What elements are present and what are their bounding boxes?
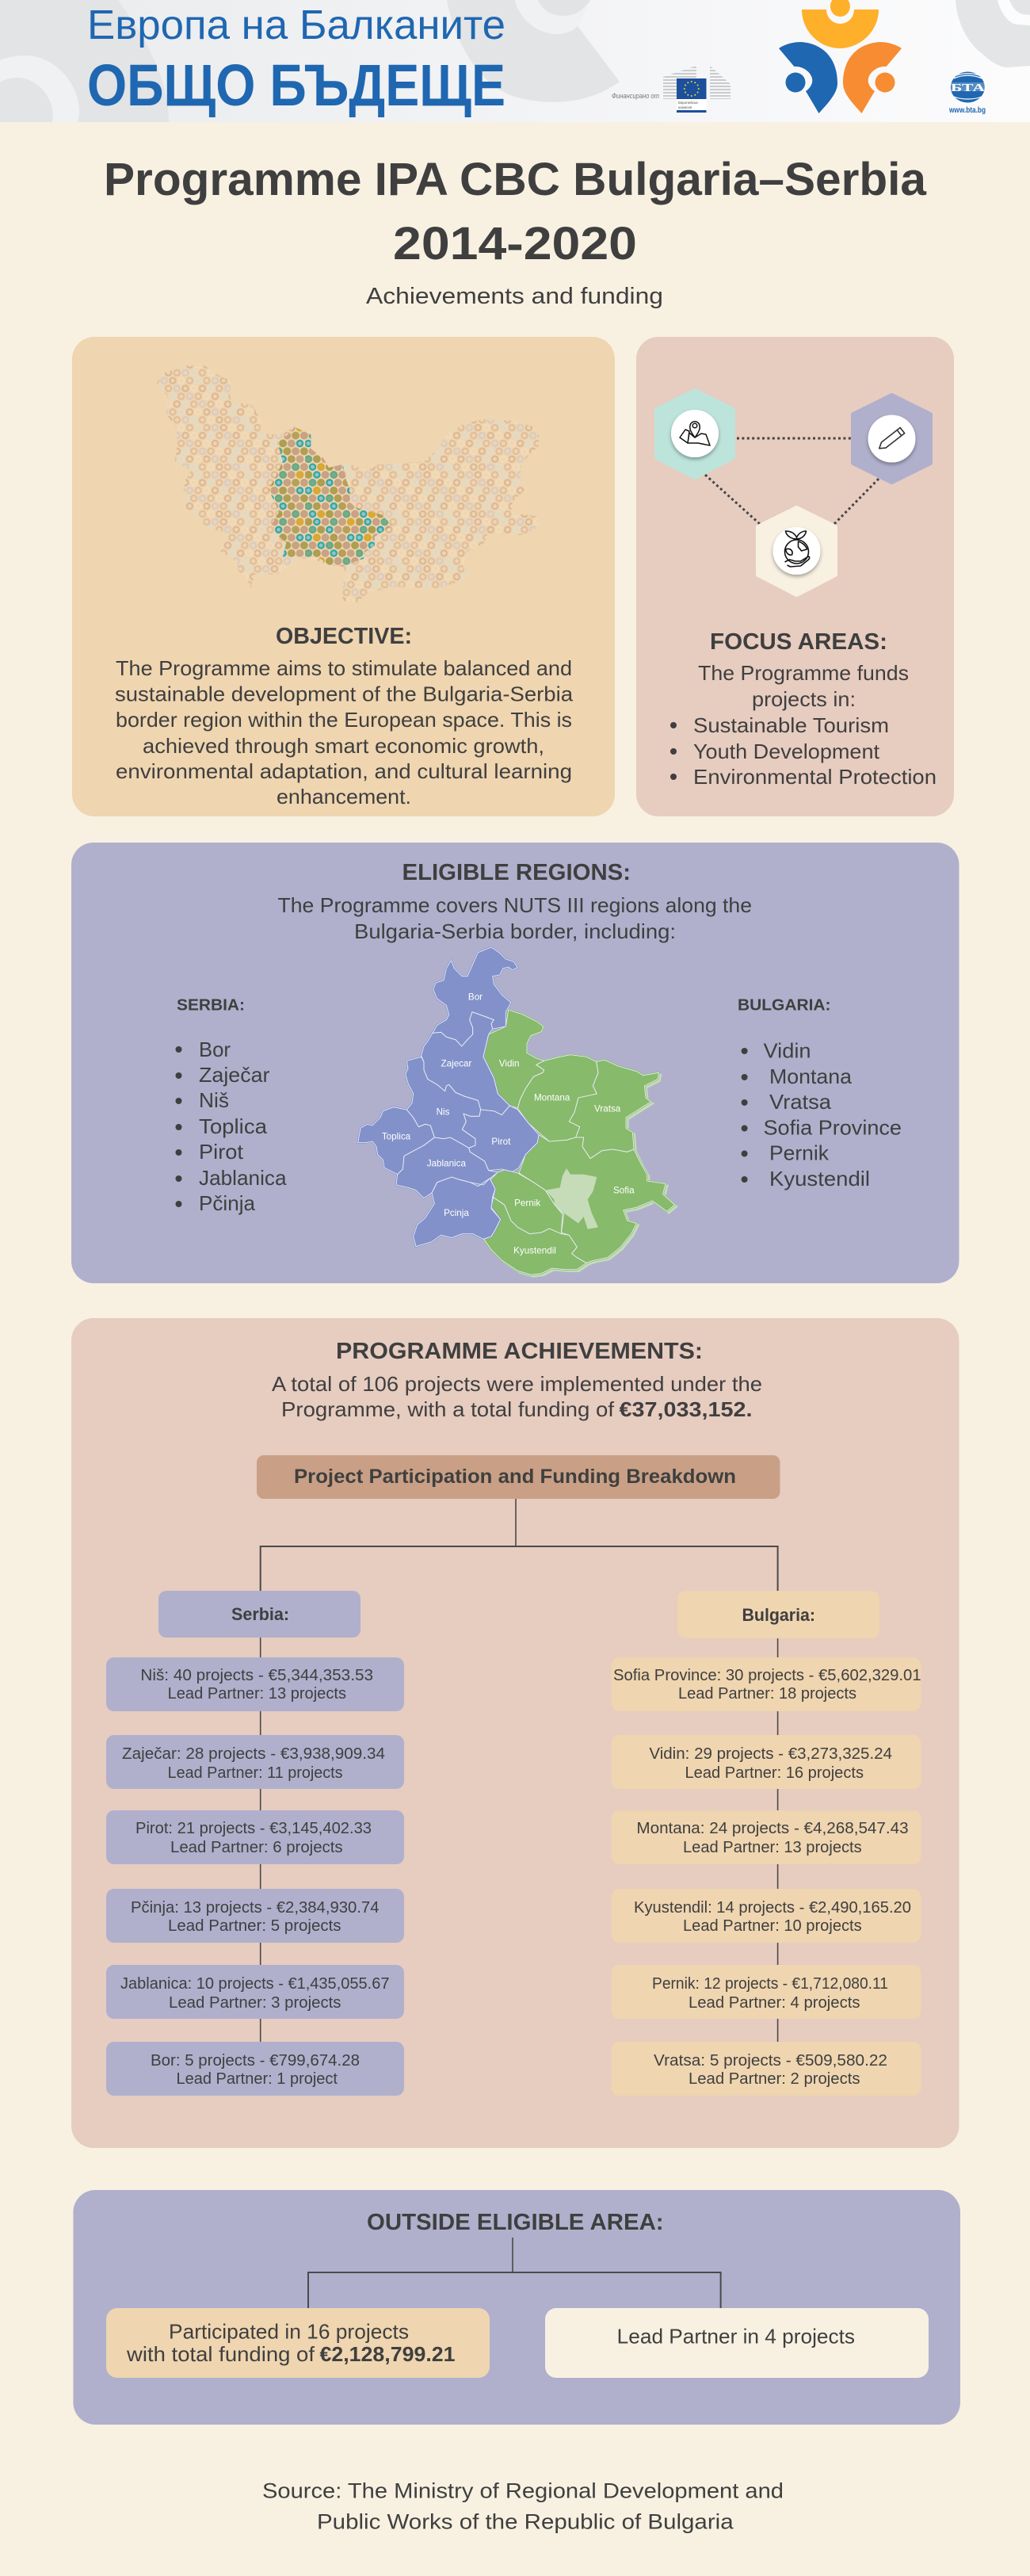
list: Serbia regions: Zaječar	[199, 1063, 270, 1087]
card: Sofia Province: Lead Partner: 18 projects	[678, 1685, 856, 1703]
banner title: ОБЩО БЪДЕЩЕ	[87, 52, 505, 118]
heading: outside eligible area: OUTSIDE ELIGIBLE AREA:	[367, 2210, 664, 2235]
intro text: Bulgaria-Serbia border, including:	[354, 919, 676, 943]
European Commission funding logo: Европейска	[678, 100, 698, 105]
European Commission funding logo	[612, 66, 731, 113]
card: Bor: Bor: 5 projects - €799,674.28	[151, 2052, 360, 2070]
map of eligible regions: Montana	[534, 1092, 570, 1103]
objective text	[115, 656, 574, 808]
list: Serbia regions: Pčinja	[199, 1191, 256, 1215]
card: Zaječar: Zaječar: 28 projects - €3,938,909.34	[122, 1745, 385, 1763]
map of eligible regions: Pernik	[514, 1198, 540, 1209]
programme logo: three figures	[779, 0, 902, 113]
heading: eligible regions: ELIGIBLE REGIONS:	[402, 860, 631, 885]
source note: Public Works of the Republic of Bulgaria	[317, 2510, 734, 2534]
list: Serbia regions: SERBIA:	[177, 997, 245, 1015]
list: Bulgaria regions: Vidin	[764, 1038, 811, 1062]
BTA logo: www.bta.bg	[948, 106, 986, 115]
map of eligible regions: Nis	[437, 1106, 450, 1117]
list: Serbia regions: Pirot	[199, 1140, 244, 1164]
card: Vratsa	[612, 2042, 921, 2096]
banner title: Европа на Балканите	[87, 2, 505, 48]
card: Pirot: Pirot: 21 projects - €3,145,402.33	[135, 1820, 372, 1837]
BTA logo	[948, 71, 986, 115]
card: participation	[106, 2308, 490, 2378]
list: Bulgaria regions: Pernik	[769, 1141, 830, 1165]
column header: Bulgaria: Bulgaria:	[742, 1605, 815, 1625]
map of eligible regions: Pirot	[491, 1137, 511, 1147]
source note	[262, 2479, 784, 2534]
focus areas text: Sustainable Tourism	[693, 713, 889, 737]
panel: eligible regions	[71, 843, 959, 1283]
map of eligible regions: Vratsa	[594, 1104, 621, 1114]
card: Jablanica: Jablanica: 10 projects - €1,435,055.67	[120, 1975, 390, 1993]
card: Pčinja: Lead Partner: 5 projects	[168, 1917, 341, 1935]
objective text: enhancement.	[277, 785, 411, 808]
objective text: The Programme aims to stimulate balanced and	[116, 656, 572, 680]
objective text: sustainable development of the Bulgaria-Serbia	[115, 682, 574, 705]
card: Pčinja	[106, 1889, 404, 1943]
card: Kyustendil: Kyustendil: 14 projects - €2,490,165.20	[634, 1899, 911, 1917]
column header: Serbia: Serbia:	[231, 1604, 289, 1624]
breakdown header box	[257, 1455, 780, 1499]
column header: Bulgaria	[677, 1591, 879, 1638]
map of eligible regions: Vidin	[499, 1059, 520, 1069]
card: Vidin	[612, 1735, 921, 1789]
panel: outside eligible area	[73, 2190, 960, 2425]
icon: map pin on hexagon	[657, 391, 733, 477]
list: Serbia regions: Toplica	[199, 1114, 268, 1138]
card: participation: with total funding of	[126, 2342, 315, 2366]
achievements summary: €37,033,152.	[620, 1397, 753, 1421]
card: Jablanica: Lead Partner: 3 projects	[169, 1994, 341, 2012]
card: lead partner	[545, 2308, 929, 2378]
card: Zaječar	[106, 1735, 404, 1789]
icon: earth in hand on hexagon	[758, 508, 835, 594]
card: participation: Participated in 16 projects	[169, 2320, 409, 2344]
intro text	[277, 893, 752, 943]
objective text: border region within the European space. This is	[116, 708, 572, 732]
card: Pernik	[612, 1965, 921, 2019]
card: Vidin: Lead Partner: 16 projects	[685, 1764, 864, 1782]
objective text: achieved through smart economic growth,	[143, 734, 544, 758]
card: Vidin: Vidin: 29 projects - €3,273,325.24	[649, 1745, 892, 1763]
map of eligible regions: Bor	[468, 992, 483, 1002]
achievements summary	[272, 1372, 762, 1421]
map of eligible regions: Toplica	[382, 1131, 411, 1141]
title: Programme IPA CBC Bulgaria–Serbia	[104, 154, 927, 205]
map of eligible regions: Pcinja	[444, 1208, 469, 1218]
dotted connectors	[705, 438, 879, 525]
panel: focus areas	[636, 337, 954, 816]
card: Pernik: Lead Partner: 4 projects	[689, 1994, 860, 2012]
card: lead partner: Lead Partner in 4 projects	[617, 2325, 855, 2349]
tree connectors	[308, 2238, 721, 2308]
focus areas text: Environmental Protection	[693, 765, 937, 789]
card: Montana: Montana: 24 projects - €4,268,547.43	[636, 1820, 909, 1837]
panel: programme achievements	[71, 1318, 959, 2148]
card: Bor: Lead Partner: 1 project	[176, 2070, 338, 2088]
source note: Source: The Ministry of Regional Development and	[262, 2479, 784, 2503]
focus areas text: Youth Development	[693, 740, 880, 763]
list: Serbia regions: Jablanica	[199, 1166, 287, 1190]
column header: Serbia	[158, 1591, 360, 1638]
subtitle: Achievements and funding	[366, 284, 663, 309]
map of eligible regions	[358, 947, 677, 1277]
card: Montana: Lead Partner: 13 projects	[683, 1839, 862, 1856]
card: Sofia Province	[612, 1657, 921, 1711]
European Commission funding logo: Финансирано от	[612, 92, 659, 100]
list: Bulgaria regions: BULGARIA:	[738, 997, 830, 1015]
tree connectors	[261, 1499, 778, 2042]
European Commission funding logo: комисия	[678, 105, 692, 109]
icon: pencil on hexagon	[853, 396, 930, 482]
banner title	[87, 2, 505, 118]
header banner	[0, 0, 1030, 122]
map of eligible regions: Jablanica	[427, 1158, 466, 1168]
list: Bulgaria regions	[738, 997, 902, 1191]
focus areas text: projects in:	[752, 687, 856, 711]
list: Serbia regions	[176, 997, 287, 1215]
heading: objective: OBJECTIVE:	[276, 624, 412, 649]
card: Sofia Province: Sofia Province: 30 projects - €5,602,329.01	[613, 1667, 921, 1684]
card: Niš: Lead Partner: 13 projects	[168, 1685, 346, 1703]
card: Jablanica	[106, 1965, 404, 2019]
card: Niš	[106, 1657, 404, 1711]
list: Bulgaria regions: Vratsa	[769, 1090, 832, 1114]
card: Pirot	[106, 1810, 404, 1864]
card: Kyustendil	[612, 1889, 921, 1943]
intro text: The Programme covers NUTS III regions along the	[277, 893, 752, 917]
achievements summary: Programme, with a total funding of	[281, 1397, 615, 1421]
list: Serbia regions: Bor	[199, 1038, 231, 1061]
card: Vratsa: Vratsa: 5 projects - €509,580.22	[654, 2052, 887, 2070]
card: Montana	[612, 1810, 921, 1864]
heading: focus areas: FOCUS AREAS:	[710, 629, 887, 655]
heading: achievements: PROGRAMME ACHIEVEMENTS:	[336, 1339, 703, 1364]
map of eligible regions: Sofia	[613, 1186, 635, 1196]
focus areas text	[670, 661, 937, 789]
list: Serbia regions: Niš	[199, 1088, 229, 1112]
breakdown header box: Project Participation and Funding Breakdown	[294, 1466, 736, 1488]
objective text: environmental adaptation, and cultural learning	[116, 759, 572, 783]
card: participation: €2,128,799.21	[320, 2342, 455, 2366]
card: Pirot: Lead Partner: 6 projects	[170, 1839, 343, 1856]
list: Bulgaria regions: Kyustendil	[769, 1167, 870, 1191]
card: Kyustendil: Lead Partner: 10 projects	[683, 1917, 862, 1935]
map of eligible regions: Kyustendil	[513, 1245, 556, 1256]
title: 2014-2020	[393, 218, 637, 269]
card: Vratsa: Lead Partner: 2 projects	[689, 2070, 860, 2088]
map of eligible regions: Zajecar	[441, 1059, 472, 1069]
panel: objective	[72, 337, 615, 816]
achievements summary: A total of 106 projects were implemented under the	[272, 1372, 762, 1396]
dot map of the region	[151, 357, 539, 610]
BTA logo: БТА	[951, 82, 986, 94]
list: Bulgaria regions: Sofia Province	[764, 1116, 902, 1140]
card: Niš: Niš: 40 projects - €5,344,353.53	[140, 1667, 373, 1684]
card: Pernik: Pernik: 12 projects - €1,712,080.11	[652, 1975, 888, 1993]
list: Bulgaria regions: Montana	[769, 1064, 853, 1088]
card: Pčinja: Pčinja: 13 projects - €2,384,930.74	[131, 1899, 379, 1917]
title	[104, 154, 927, 269]
card: Bor	[106, 2042, 404, 2096]
card: Zaječar: Lead Partner: 11 projects	[168, 1764, 343, 1782]
focus areas text: The Programme funds	[698, 661, 909, 685]
